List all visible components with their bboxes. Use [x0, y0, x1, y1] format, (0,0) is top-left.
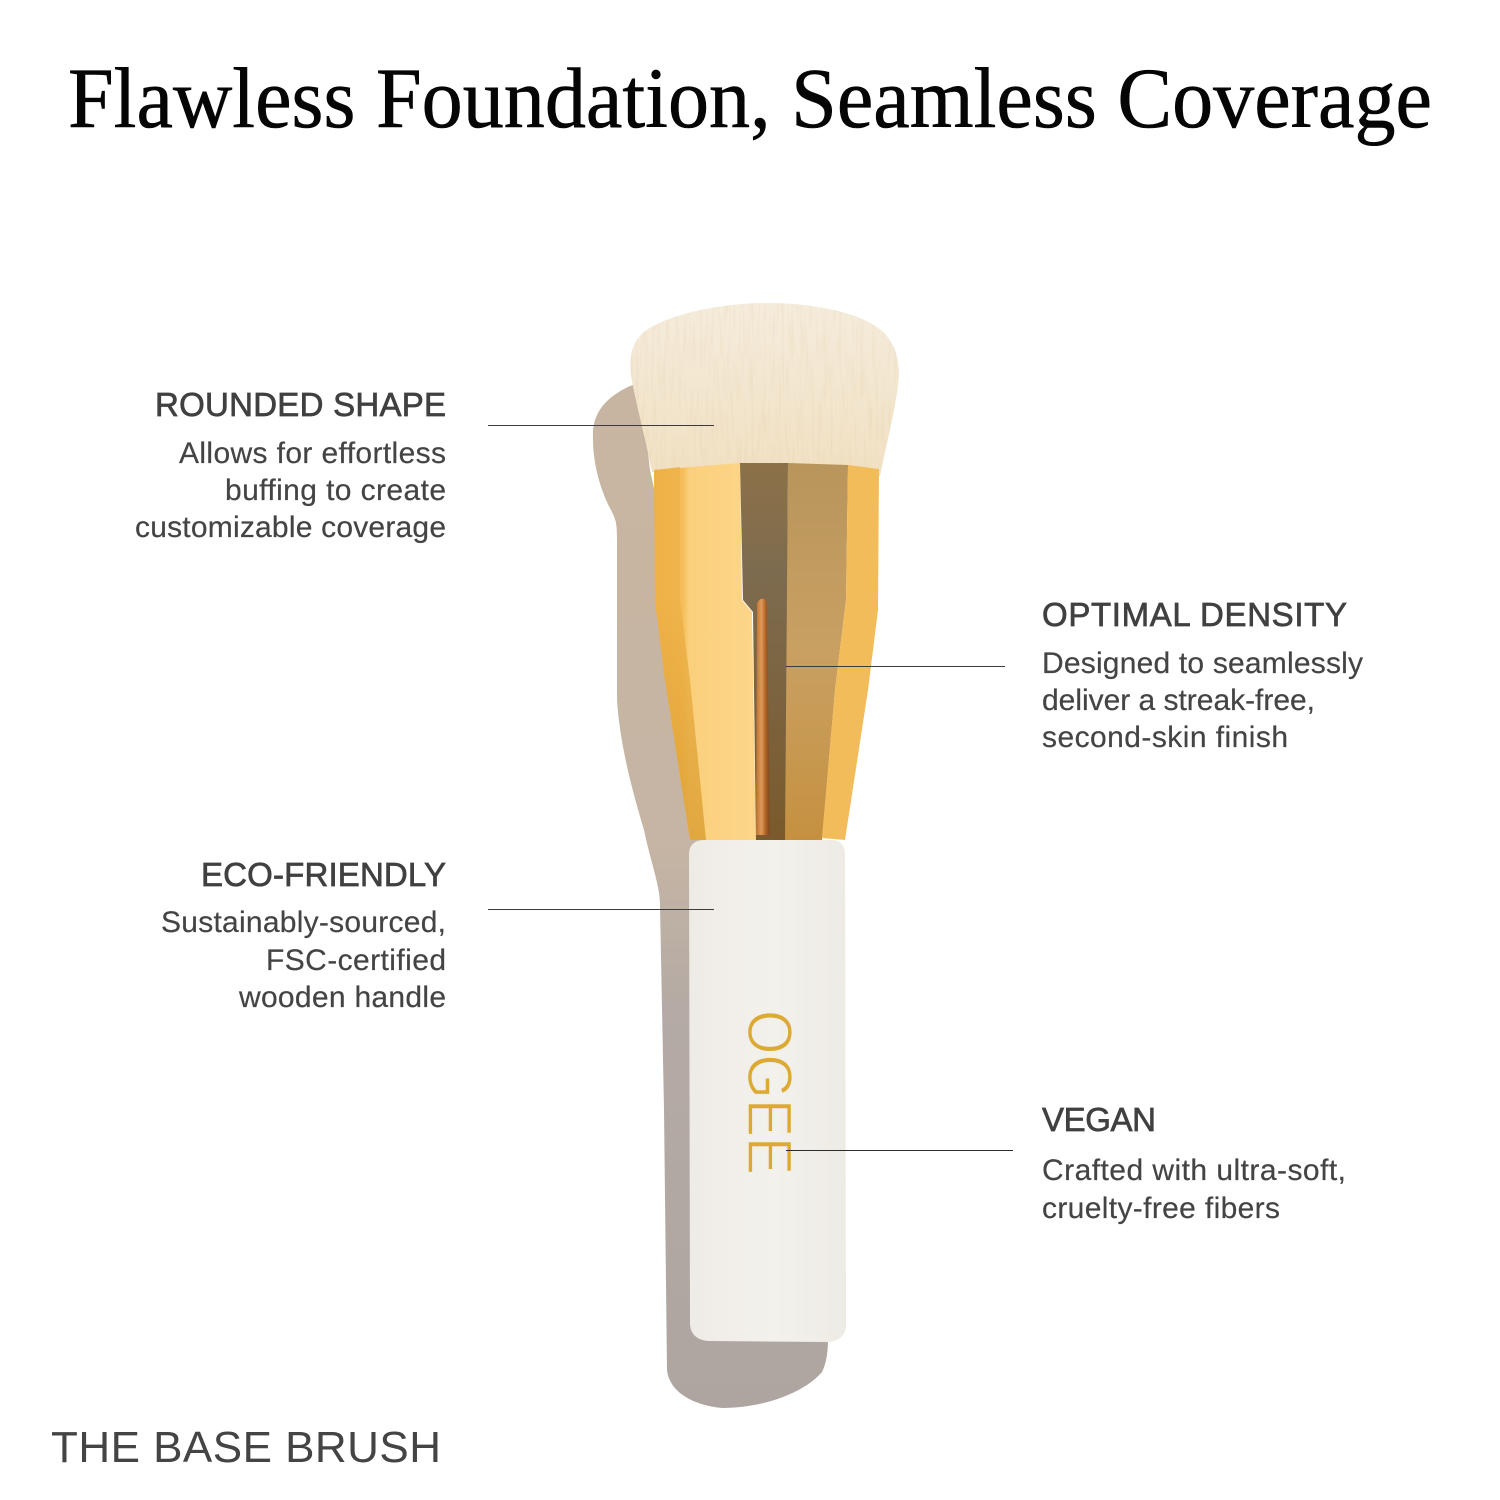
- callout: optimal density: [1042, 596, 1363, 754]
- callout: optimal density: second-skin finish: [1042, 721, 1288, 754]
- callout: rounded shape: Allows for effortless: [179, 437, 446, 470]
- callout: vegan: cruelty-free fibers: [1042, 1192, 1280, 1225]
- leader line: eco-friendly: [488, 909, 714, 910]
- callout: rounded shape: customizable coverage: [135, 511, 446, 544]
- ferrule seam highlight: [756, 599, 770, 835]
- callout: eco-friendly: [161, 856, 446, 1014]
- callout: eco-friendly: Sustainably-sourced,: [161, 906, 446, 939]
- callout: rounded shape: ROUNDED SHAPE: [155, 386, 446, 423]
- callout: eco-friendly: wooden handle: [238, 981, 446, 1014]
- brush cast shadow: [593, 382, 828, 1408]
- callout: vegan: [1042, 1101, 1346, 1225]
- leader line: optimal density: [786, 666, 1005, 667]
- leader line: rounded shape: [488, 425, 714, 426]
- brush illustration: [630, 303, 899, 1342]
- callout: optimal density: OPTIMAL DENSITY: [1042, 596, 1347, 633]
- callout: optimal density: deliver a streak-free,: [1042, 684, 1315, 717]
- callout: eco-friendly: ECO-FRIENDLY: [201, 856, 446, 893]
- callout: vegan: Crafted with ultra-soft,: [1042, 1154, 1346, 1187]
- callout: rounded shape: [135, 386, 446, 544]
- callout: rounded shape: buffing to create: [225, 474, 446, 507]
- callout: vegan: VEGAN: [1042, 1101, 1156, 1138]
- callout: optimal density: Designed to seamlessly: [1042, 647, 1363, 680]
- brush head bristles: [630, 303, 899, 476]
- callout: eco-friendly: FSC-certified: [266, 944, 446, 977]
- title: Flawless Foundation, Seamless Coverage: [68, 50, 1432, 146]
- gold OGEE logo: OGEE: [734, 1010, 804, 1175]
- white handle: [689, 840, 846, 1342]
- leader line: vegan: [786, 1150, 1013, 1151]
- product name: THE BASE BRUSH: [51, 1423, 441, 1472]
- metal ferrule: [654, 463, 879, 840]
